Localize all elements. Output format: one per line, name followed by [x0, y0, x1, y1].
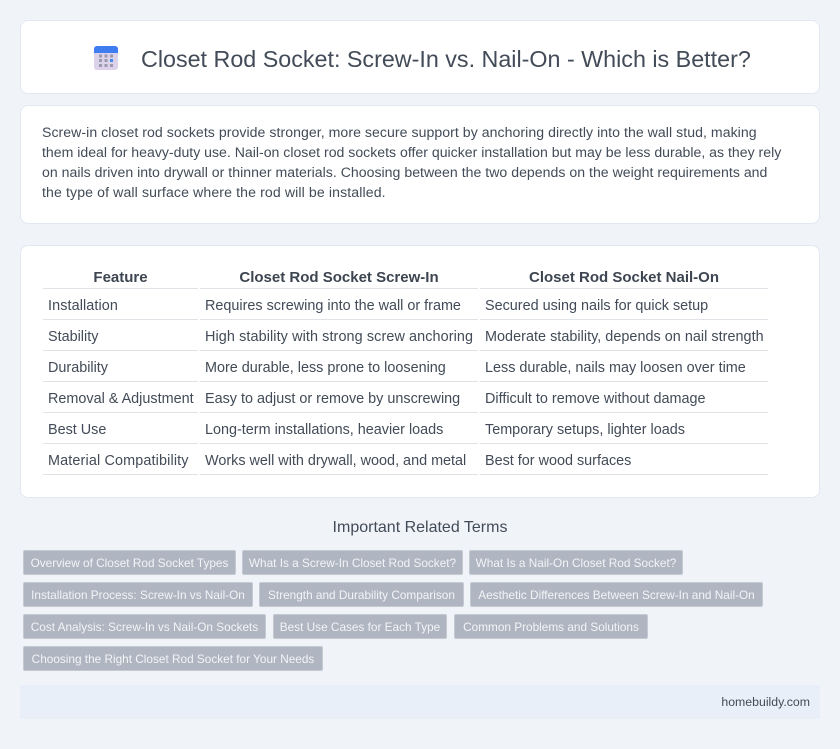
tag [454, 614, 648, 639]
title: Closet Rod Socket: Screw-In vs. Nail-On - Which is Better? [141, 46, 751, 72]
tag [23, 646, 323, 671]
panel: comparison table: Requires screwing into the wall or frame [205, 298, 461, 314]
tag [23, 550, 236, 575]
panel: comparison table: Best for wood surfaces [485, 453, 631, 469]
tag [470, 582, 763, 607]
footer credit: homebuildy.com [721, 695, 810, 709]
tag [242, 550, 463, 575]
row: removal and adjustment: Removal & Adjustment [48, 391, 194, 407]
panel: comparison table [20, 245, 820, 498]
intro line 3: on nails driven into drywall or thinner materials. Choosing between the two depends on the weight requirements and [42, 164, 767, 180]
row: material compatibility: Material Compatibility [48, 453, 189, 469]
panel: comparison table: High stability with strong screw anchoring [205, 329, 473, 345]
tag [23, 582, 253, 607]
panel: comparison table: More durable, less prone to loosening [205, 360, 446, 376]
panel: comparison table: Easy to adjust or remove by unscrewing [205, 391, 460, 407]
tag: What Is a Nail-On Closet Rod Socket? [476, 556, 676, 570]
tag [259, 582, 464, 607]
tag: Strength and Durability Comparison [268, 588, 455, 602]
tag: Aesthetic Differences Between Screw-In and Nail-On [478, 588, 755, 602]
tag [273, 614, 447, 639]
tag [469, 550, 683, 575]
tag: Choosing the Right Closet Rod Socket for Your Needs [32, 652, 314, 666]
intro line 2: them ideal for heavy-duty use. Nail-on closet rod sockets offer quicker installation but may be less durable, as they rely [42, 144, 781, 160]
header panel [20, 20, 820, 94]
tag: Best Use Cases for Each Type [280, 620, 440, 634]
row: stability: Stability [48, 329, 98, 345]
panel: comparison table: Long-term installations, heavier loads [205, 422, 443, 438]
heading: related terms: Important Related Terms [333, 519, 507, 536]
footer bar [20, 685, 820, 719]
tag: Installation Process: Screw-In vs Nail-On [31, 588, 245, 602]
panel: intro text [20, 105, 820, 224]
row: durability: Durability [48, 360, 108, 376]
column heading: screw-in: Closet Rod Socket Screw-In [239, 269, 439, 286]
intro line 4: the type of wall surface where the rod will be installed. [42, 184, 386, 200]
row: installation: Installation [48, 298, 118, 314]
panel: comparison table: Temporary setups, lighter loads [485, 422, 685, 438]
row: best use: Best Use [48, 422, 106, 438]
panel: comparison table: Difficult to remove without damage [485, 391, 706, 407]
icon: calendar [94, 46, 118, 70]
tag list [23, 550, 763, 671]
panel: comparison table: Moderate stability, depends on nail strength [485, 329, 764, 345]
tag: Overview of Closet Rod Socket Types [31, 556, 228, 570]
tag [23, 614, 266, 639]
column heading: nail-on: Closet Rod Socket Nail-On [529, 269, 719, 286]
tag: What Is a Screw-In Closet Rod Socket? [249, 556, 456, 570]
table header row [93, 269, 719, 286]
tag: Cost Analysis: Screw-In vs Nail-On Sockets [31, 620, 258, 634]
column heading: feature: Feature [93, 269, 148, 286]
panel: comparison table: Secured using nails for quick setup [485, 298, 708, 314]
panel: comparison table: Works well with drywall, wood, and metal [205, 453, 466, 469]
intro line 1: Screw-in closet rod sockets provide stronger, more secure support by anchoring directly into the wall stud, making [42, 124, 757, 140]
panel: comparison table: Less durable, nails may loosen over time [485, 360, 746, 376]
tag: Common Problems and Solutions [463, 620, 639, 634]
